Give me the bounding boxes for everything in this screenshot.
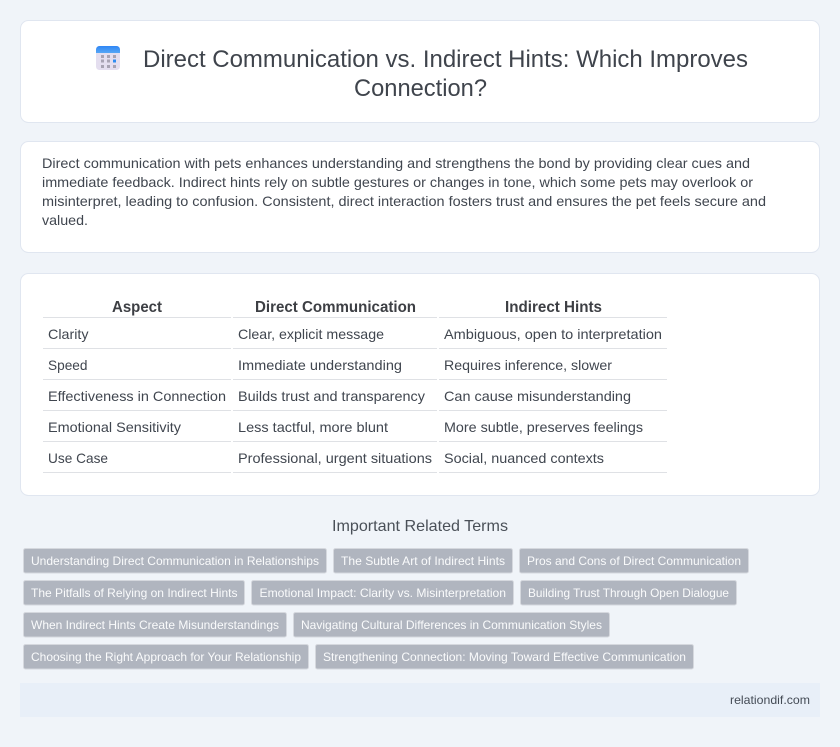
tag: Building Trust Through Open Dialogue (528, 586, 729, 600)
tag (316, 644, 694, 669)
table row: use case: Professional, urgent situations (238, 450, 432, 466)
tag (24, 548, 326, 573)
related terms tags (24, 548, 748, 669)
tag (334, 548, 512, 573)
table row: clarity (48, 326, 662, 342)
tag: Pros and Cons of Direct Communication (527, 554, 741, 568)
table row: use case: Social, nuanced contexts (444, 450, 604, 466)
table header: Direct Communication (255, 299, 416, 316)
tag: The Pitfalls of Relying on Indirect Hints (31, 586, 238, 600)
tag: Understanding Direct Communication in Relationships (31, 554, 319, 568)
table header (112, 299, 602, 316)
tag: Navigating Cultural Differences in Communication Styles (301, 618, 602, 632)
title (143, 46, 748, 102)
table row: effectiveness in connection: Builds trust and transparency (238, 388, 425, 404)
table row: clarity: Clarity (48, 326, 88, 342)
table row: emotional sensitivity: Less tactful, more blunt (238, 419, 388, 435)
heading: important related terms: Important Related Terms (332, 518, 508, 535)
table header: Indirect Hints (505, 299, 602, 316)
table row: speed: Immediate understanding (238, 357, 402, 373)
footer source text: relationdif.com (730, 693, 810, 707)
tag: The Subtle Art of Indirect Hints (341, 554, 505, 568)
table row: speed: Speed (48, 357, 88, 373)
tag: Choosing the Right Approach for Your Relationship (31, 650, 301, 664)
tag: Emotional Impact: Clarity vs. Misinterpretation (260, 586, 506, 600)
icon: calendar grid (96, 46, 120, 70)
table row: clarity: Ambiguous, open to interpretation (444, 326, 662, 342)
table row: speed (48, 357, 612, 373)
table row: effectiveness in connection: Can cause misunderstanding (444, 388, 631, 404)
table row: use case: Use Case (48, 450, 108, 466)
tag (252, 580, 514, 605)
table row: use case (48, 450, 604, 466)
text block: description: misinterpret, leading to confusion. Consistent, direct interaction fosters trust and ensures the pet feels secure and (42, 193, 766, 209)
tag (24, 612, 286, 637)
tag: When Indirect Hints Create Misunderstandings (31, 618, 279, 632)
tag: Strengthening Connection: Moving Toward Effective Communication (323, 650, 686, 664)
table row: clarity: Clear, explicit message (238, 326, 384, 342)
tag (520, 580, 736, 605)
text block: description: valued. (42, 212, 88, 228)
table row: emotional sensitivity: Emotional Sensitivity (48, 419, 181, 435)
tag (294, 612, 610, 637)
text block: description: Direct communication with pets enhances understanding and strengthens the bond by providing clear cues and (42, 155, 750, 171)
title: Direct Communication vs. Indirect Hints: Which Improves (143, 46, 748, 73)
title: Connection? (354, 75, 487, 102)
tag (24, 580, 244, 605)
table row: speed: Requires inference, slower (444, 357, 612, 373)
panel: comparison table (20, 274, 820, 496)
panel: header (20, 20, 820, 122)
table row: emotional sensitivity (48, 419, 643, 435)
tag (520, 548, 748, 573)
table row: effectiveness in connection: Effectiveness in Connection (48, 388, 226, 404)
footer (20, 683, 820, 717)
tag (24, 644, 308, 669)
table row: effectiveness in connection (48, 388, 631, 404)
table row: emotional sensitivity: More subtle, preserves feelings (444, 419, 643, 435)
text block: description: immediate feedback. Indirect hints rely on subtle gestures or changes in tone, which some pets may overlook or (42, 174, 753, 190)
table header: Aspect (112, 299, 163, 316)
panel: description (20, 142, 820, 252)
text block: description (42, 155, 766, 228)
